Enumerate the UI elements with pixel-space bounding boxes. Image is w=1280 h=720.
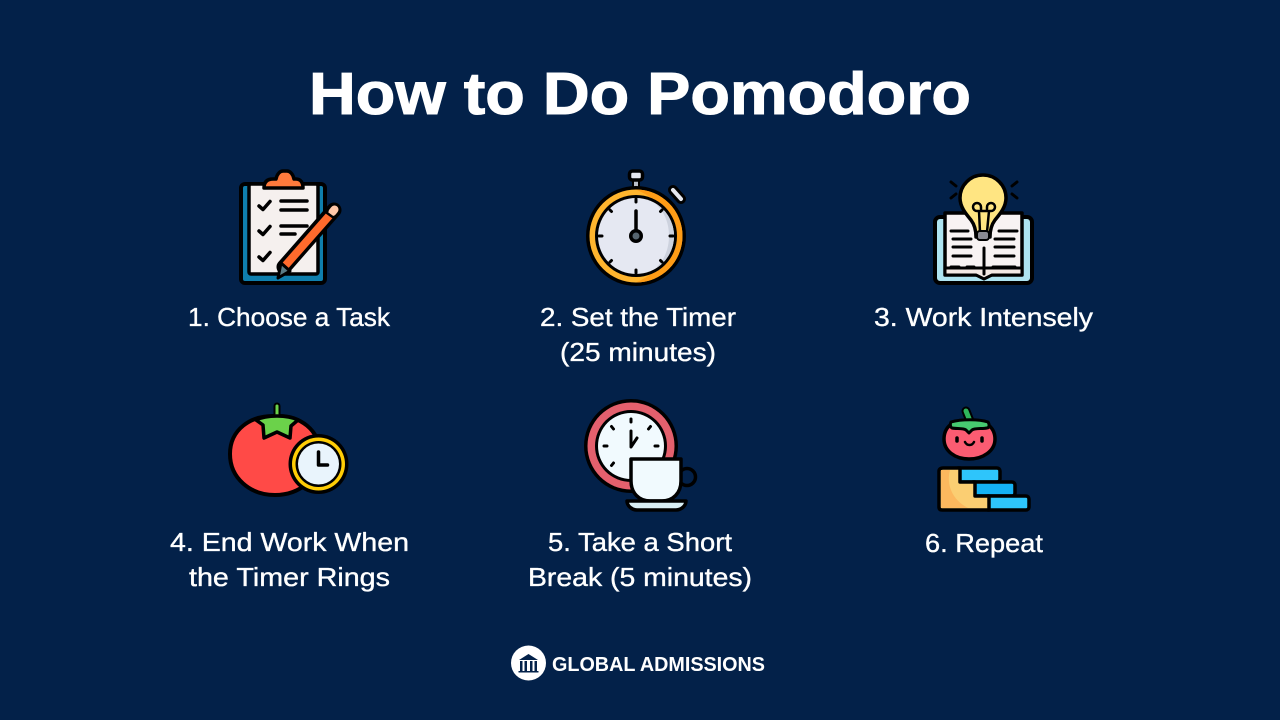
icon: stopwatch (586, 171, 686, 286)
label 5: 5. Take a Short (548, 527, 733, 557)
icon: open book with light bulb (935, 175, 1032, 283)
label 2 (540, 302, 736, 367)
icon: institution building (511, 646, 546, 680)
step 1: choose a task (188, 171, 391, 332)
step 6: repeat (925, 411, 1044, 558)
label 3: 3. Work Intensely (874, 302, 1093, 332)
label 2: (25 minutes) (560, 337, 716, 367)
title: How to Do Pomodoro (309, 61, 971, 127)
label 5: Break (5 minutes) (528, 562, 752, 592)
icon: tomato on stairs (939, 411, 1029, 510)
icon: clock with coffee cup (584, 399, 696, 510)
label 4: the Timer Rings (189, 562, 390, 592)
label 4 (170, 527, 409, 592)
icon: tomato with clock (230, 406, 348, 495)
label 6: 6. Repeat (925, 528, 1044, 558)
label 4: 4. End Work When (170, 527, 409, 557)
label 5 (528, 527, 752, 592)
step 3: work intensely (874, 175, 1093, 332)
step 2: set the timer (540, 171, 736, 367)
step 4: end work when the timer rings (170, 406, 409, 592)
icon: clipboard with pencil (241, 171, 334, 283)
step 5: take a short break (528, 399, 752, 592)
label 2: 2. Set the Timer (540, 302, 736, 332)
brand name: GLOBAL ADMISSIONS (552, 654, 765, 676)
label 1: 1. Choose a Task (188, 302, 391, 332)
brand logo (511, 646, 765, 680)
